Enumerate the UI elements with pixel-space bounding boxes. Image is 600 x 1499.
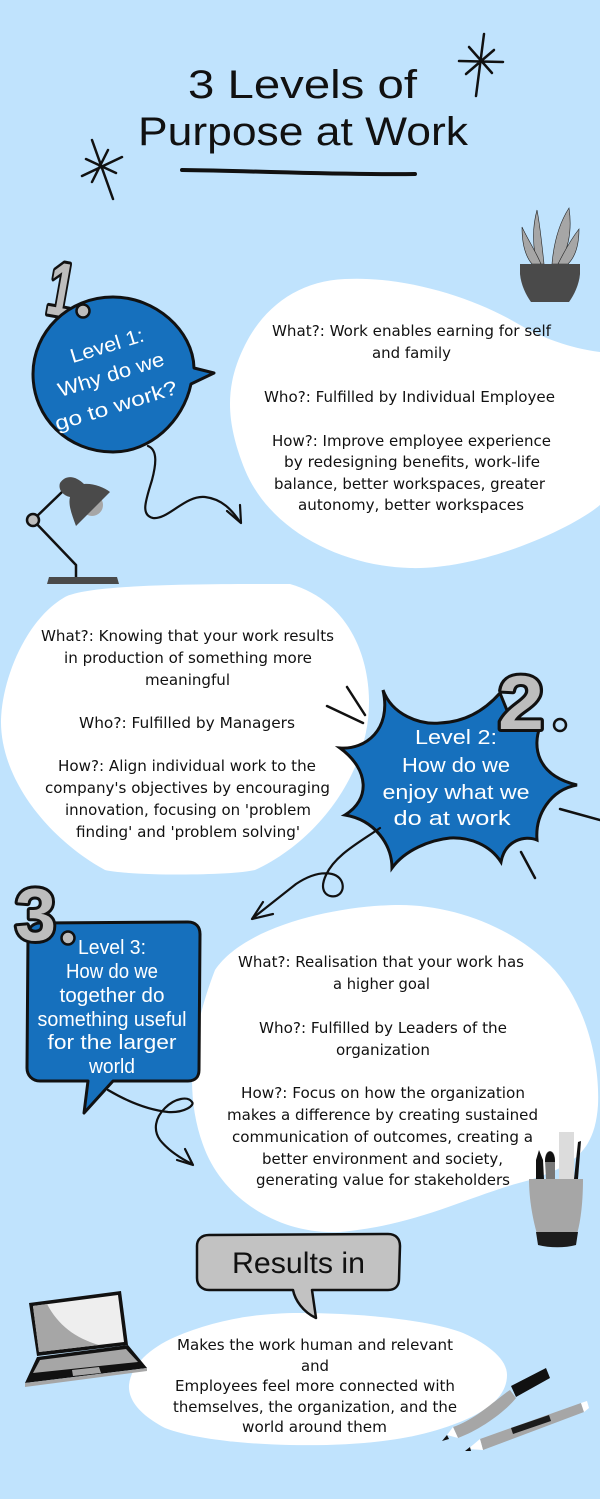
icon: pen — [465, 1401, 589, 1451]
icon: number 2 — [498, 661, 566, 746]
speech burst: level 2: How do we — [402, 755, 510, 777]
speech bubble: level 1: Level 1: — [68, 325, 147, 368]
icon: star left — [82, 140, 122, 199]
icon: laptop — [25, 1291, 147, 1387]
speech bubble: level 1: go to work? — [52, 377, 180, 435]
panel: level 1 description: How?: Improve employee experience — [272, 432, 551, 450]
panel: level 3 description: Who?: Fulfilled by Leaders of the — [259, 1019, 507, 1037]
title: Purpose at Work — [138, 110, 469, 154]
panel: level 2 description: Who?: Fulfilled by Managers — [79, 714, 295, 732]
panel: level 3 description: a higher goal — [333, 975, 430, 993]
speech bubble: results in: Results in — [232, 1247, 365, 1280]
panel: results description: Employees feel more connected with — [175, 1377, 455, 1395]
panel: level 2 description: in production of something more — [64, 649, 312, 667]
panel: level 1 description — [230, 279, 600, 568]
speech bubble: level 3: How do we — [66, 961, 158, 983]
speech bubble: level 1: Why do we — [55, 349, 167, 402]
panel: level 3 description — [192, 905, 598, 1232]
speech bubble: level 3: for the larger — [48, 1032, 177, 1054]
arrow: level 3 to description — [108, 1090, 193, 1165]
panel: level 2 description: company's objectives by encouraging — [45, 779, 330, 797]
panel: level 3 description: makes a difference by creating sustained — [227, 1106, 538, 1124]
icon: star top right — [459, 34, 503, 96]
speech bubble: level 3: something useful — [38, 1009, 186, 1031]
panel: level 3 description: organization — [336, 1041, 430, 1059]
panel: level 3 description: better environment and society, — [262, 1150, 503, 1168]
panel: level 1 description: and family — [372, 344, 451, 362]
icon: number 2: 2 — [498, 661, 544, 746]
burst ticks — [327, 687, 600, 878]
title: 3 Levels of — [188, 63, 418, 107]
panel: level 3 description: communication of outcomes, creating a — [232, 1128, 533, 1146]
panel: level 1 description: autonomy, better workspaces — [298, 496, 524, 514]
arrow: level 2 to description — [252, 828, 380, 919]
panel: level 1 description: by redesigning benefits, work-life — [284, 453, 540, 471]
speech bubble: results in — [197, 1234, 400, 1318]
panel: results description: world around them — [242, 1418, 387, 1436]
panel: level 2 description — [1, 584, 369, 874]
icon: pen cup — [529, 1132, 583, 1247]
icon: number 3: 3 — [15, 873, 56, 956]
speech bubble: level 3: together do — [60, 985, 164, 1007]
panel: results description: themselves, the organization, and the — [173, 1398, 457, 1416]
panel: level 3 description: How?: Focus on how the organization — [241, 1084, 525, 1102]
panel: level 2 description: finding' and 'problem solving' — [76, 823, 300, 841]
panel: level 1 description: What?: Work enables earning for self — [272, 322, 552, 340]
speech burst: level 2: do at work — [394, 808, 512, 830]
panel: level 1 description: Who?: Fulfilled by Individual Employee — [264, 388, 555, 406]
panel: results description — [129, 1313, 507, 1445]
speech burst: level 2: enjoy what we — [382, 782, 530, 804]
icon: desk lamp — [27, 477, 119, 584]
icon: number 1: 1 — [41, 246, 81, 334]
speech bubble: level 3: Level 3: — [78, 937, 146, 959]
panel: results description: and — [301, 1357, 329, 1375]
panel: level 2 description: innovation, focusing on 'problem — [65, 801, 311, 819]
panel: level 3 description: What?: Realisation that your work has — [238, 953, 524, 971]
speech bubble: level 3: world — [88, 1056, 135, 1078]
speech bubble: level 3 — [27, 922, 200, 1113]
speech burst: level 2: Level 2: — [415, 727, 497, 749]
panel: level 2 description: What?: Knowing that your work results — [41, 627, 334, 645]
panel: level 3 description: generating value for stakeholders — [256, 1171, 510, 1189]
speech bubble: level 1 — [33, 297, 214, 452]
icon: marker pen — [442, 1368, 550, 1441]
panel: level 2 description: meaningful — [145, 671, 230, 689]
arrow: level 1 to description — [145, 446, 241, 523]
speech burst: level 2 — [340, 690, 577, 868]
icon: plant — [520, 208, 580, 302]
title — [138, 63, 469, 174]
panel: level 1 description: balance, better workspaces, greater — [274, 475, 546, 493]
panel: results description: Makes the work human and relevant — [177, 1336, 453, 1354]
panel: level 2 description: How?: Align individual work to the — [58, 757, 316, 775]
